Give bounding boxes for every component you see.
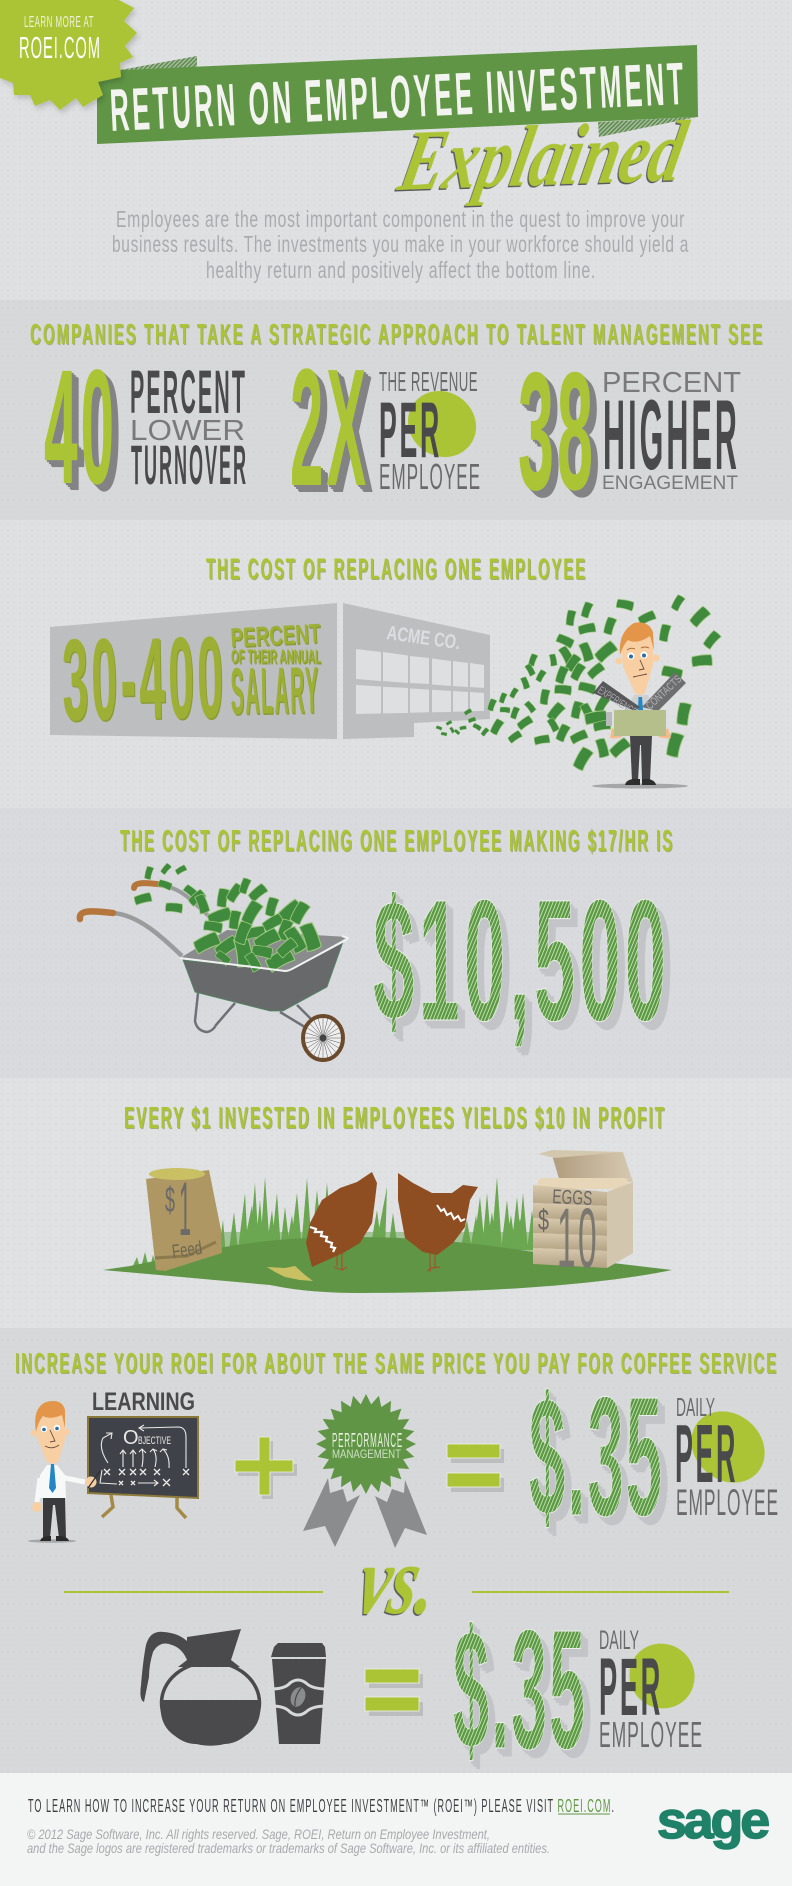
learning label: LEARNING bbox=[92, 1388, 195, 1416]
presenter bbox=[28, 1401, 100, 1543]
hen pecking bbox=[306, 1172, 377, 1270]
feed sack bbox=[146, 1167, 222, 1271]
building windows bbox=[356, 649, 484, 714]
flying money bbox=[436, 594, 721, 772]
hen standing bbox=[398, 1173, 478, 1272]
stat: 38 percent higher engagement: ENGAGEMENT bbox=[602, 473, 738, 494]
farm illustration bbox=[103, 1150, 672, 1293]
feed sack: $ bbox=[165, 1179, 175, 1220]
stat: 30-400 percent of their annual salary: 30-400 bbox=[61, 612, 227, 745]
stat: 40 percent lower turnover: LOWER bbox=[130, 415, 245, 447]
chalkboard: BJECTIVE bbox=[138, 1435, 171, 1447]
copyright: and the Sage logos are registered trademarks or trademarks of Sage Software, Inc. or its affiliated entities. bbox=[27, 1840, 550, 1856]
copyright bbox=[27, 1826, 550, 1856]
chalkboard bbox=[88, 1417, 198, 1518]
award ribbon: performance management: PERFORMANCE bbox=[332, 1430, 403, 1452]
tablet: contacts bbox=[642, 672, 686, 712]
stat: 30-400 percent of their annual salary: OF THEIR ANNUAL bbox=[231, 647, 321, 668]
panel: strategic approach stats: PERCENT bbox=[130, 358, 247, 426]
panel: $1 yields $10 bbox=[0, 1078, 792, 1328]
panel: coffee comparison bbox=[0, 1328, 792, 1785]
badge: learn more: LEARN MORE AT bbox=[24, 14, 94, 31]
icon: coffee cup bbox=[271, 1643, 327, 1744]
badge: learn more bbox=[0, 0, 137, 110]
panel: strategic approach stats bbox=[0, 300, 792, 525]
spilled feed bbox=[267, 1266, 313, 1281]
panel: header bbox=[0, 0, 792, 300]
feed sack: 1 bbox=[179, 1167, 191, 1252]
chalkboard: O bbox=[123, 1427, 139, 1449]
figure: $.35 daily per employee (coffee): PER bbox=[599, 1642, 663, 1733]
stat: 40 percent lower turnover: 40 bbox=[44, 335, 117, 518]
badge: learn more: ROEI.COM bbox=[19, 30, 101, 65]
panel: strategic approach stats: TURNOVER bbox=[131, 433, 248, 496]
script subtitle: Explained: Explained bbox=[391, 103, 695, 209]
egg box: 10 bbox=[557, 1191, 599, 1285]
egg box bbox=[533, 1150, 633, 1285]
sage logo: sage bbox=[657, 1792, 769, 1850]
plus sign bbox=[235, 1437, 297, 1499]
panel: cost at $17/hr bbox=[0, 808, 792, 1078]
money pile bbox=[134, 863, 322, 973]
panel: cost of replacing one employee bbox=[0, 520, 792, 808]
copyright: © 2012 Sage Software, Inc. All rights reserved. Sage, ROEI, Return on Employee Investment, bbox=[27, 1826, 490, 1842]
award ribbon: performance management bbox=[303, 1394, 427, 1548]
title ribbon bbox=[97, 45, 698, 144]
grass blades bbox=[132, 1177, 537, 1268]
vs. script: vs. bbox=[349, 1527, 448, 1635]
tablet: contacts: CONTACTS bbox=[644, 673, 684, 712]
lime blob bbox=[395, 378, 489, 470]
stat: 2X the revenue per employee: THE REVENUE bbox=[379, 366, 478, 397]
stat: 30-400 percent of their annual salary: PERCENT bbox=[230, 618, 322, 653]
stat: 2X the revenue per employee: 2X bbox=[290, 335, 369, 521]
tablet: experience bbox=[593, 681, 640, 718]
intro paragraph bbox=[112, 206, 689, 283]
stat: 2X the revenue per employee: PER bbox=[379, 385, 442, 474]
equals sign 2 bbox=[365, 1669, 423, 1716]
intro paragraph: healthy return and positively affect the bottom line. bbox=[206, 257, 596, 283]
figure: $.35 daily per employee (coffee): DAILY bbox=[599, 1625, 639, 1655]
equals sign 1 bbox=[447, 1444, 504, 1492]
wheel bbox=[303, 1016, 343, 1060]
award ribbon: performance management: MANAGEMENT bbox=[332, 1449, 401, 1461]
stat: 2X the revenue per employee: EMPLOYEE bbox=[379, 456, 481, 497]
worried employee with box bbox=[592, 622, 688, 788]
icon: coffee pot bbox=[140, 1629, 260, 1744]
stat: 30-400 percent of their annual salary bbox=[61, 612, 322, 745]
panel: cost of replacing one employee: SALARY bbox=[230, 652, 320, 728]
building bbox=[50, 603, 490, 739]
wheelbarrow full of money bbox=[80, 863, 348, 1060]
egg box: $ bbox=[538, 1204, 549, 1237]
panel: footer bbox=[0, 1773, 792, 1886]
stat: 38 percent higher engagement: 38 bbox=[518, 337, 596, 525]
egg box: EGGS bbox=[552, 1186, 593, 1210]
wheelbarrow handle bbox=[80, 911, 182, 956]
feed sack: Feed bbox=[171, 1238, 203, 1263]
ground bbox=[103, 1237, 672, 1293]
building sign: ACME CO. bbox=[385, 622, 462, 654]
figure: $.35 daily per employee: DAILY bbox=[676, 1392, 715, 1422]
tablet: experience: EXPERIENCE bbox=[595, 684, 639, 718]
stat: 38 percent higher engagement: PERCENT bbox=[602, 367, 741, 399]
